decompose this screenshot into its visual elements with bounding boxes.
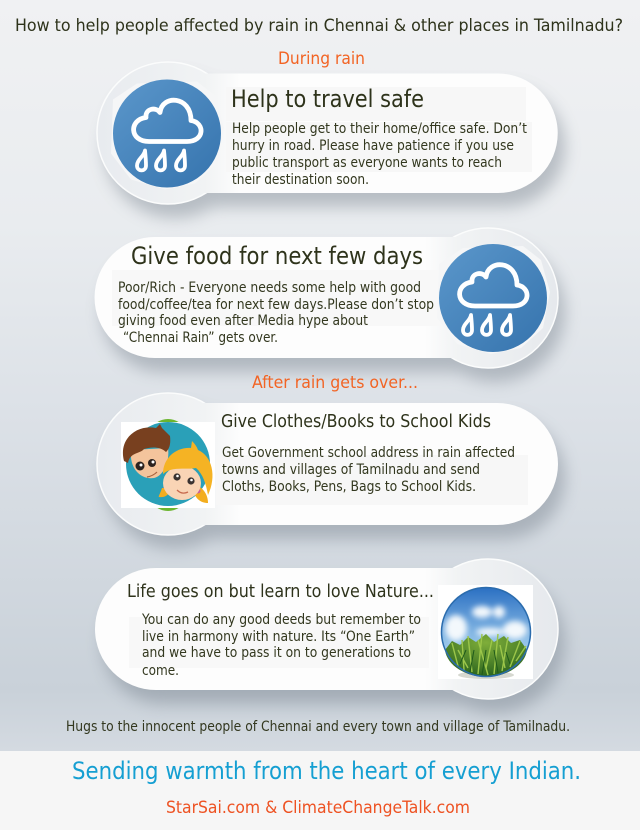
body text: “Chennai Rain” gets over. — [123, 330, 278, 346]
body text: towns and villages of Tamilnadu and send — [222, 462, 480, 478]
body text: come. — [142, 663, 179, 679]
footer credits: StarSai.com & ClimateChangeTalk.com — [166, 798, 470, 818]
body text: their destination soon. — [232, 172, 369, 188]
body text: and we have to pass it on to generations to — [142, 645, 411, 661]
body text: Get Government school address in rain affected — [222, 445, 515, 461]
heading: during rain: During rain — [278, 49, 365, 69]
heading: Give food for next few days — [131, 242, 423, 270]
body text: giving food even after Media hype about — [118, 313, 368, 329]
title: How to help people affected by rain in Chennai & other places in Tamilnadu? — [15, 16, 623, 36]
body text: live in harmony with nature. Its “One Earth” — [142, 629, 415, 645]
body text: Help people get to their home/office safe. Don’t — [232, 121, 527, 137]
body text: You can do any good deeds but remember to — [141, 612, 421, 628]
heading: Give Clothes/Books to School Kids — [221, 411, 491, 432]
image: earth globe with grass — [438, 585, 533, 679]
body text — [118, 280, 434, 346]
panel: help to travel safe — [97, 62, 565, 218]
panel: give food — [95, 228, 565, 382]
icon: rain cloud — [111, 80, 224, 190]
heading: Help to travel safe — [231, 85, 424, 113]
body text: Poor/Rich - Everyone needs some help with good — [118, 280, 421, 296]
heading: after rain: After rain gets over... — [252, 373, 418, 393]
footer band — [0, 751, 640, 830]
heading: Life goes on but learn to love Nature... — [127, 581, 434, 602]
footer slogan: Sending warmth from the heart of every Indian. — [72, 757, 581, 785]
panel: clothes and books — [97, 393, 565, 549]
body text: public transport as everyone wants to reach — [232, 155, 502, 171]
image: two children — [121, 419, 215, 511]
body text — [222, 445, 515, 495]
panel: love nature — [95, 559, 565, 713]
body text: food/coffee/tea for next few days.Please don’t stop — [118, 297, 434, 313]
body text — [232, 121, 527, 188]
icon: rain cloud — [437, 244, 550, 354]
body text: hurry in road. Please have patience if you use — [232, 138, 514, 154]
closing message: Hugs to the innocent people of Chennai and every town and village of Tamilnadu. — [66, 719, 570, 735]
body text: Cloths, Books, Pens, Bags to School Kids. — [222, 479, 476, 495]
body text — [141, 612, 421, 679]
